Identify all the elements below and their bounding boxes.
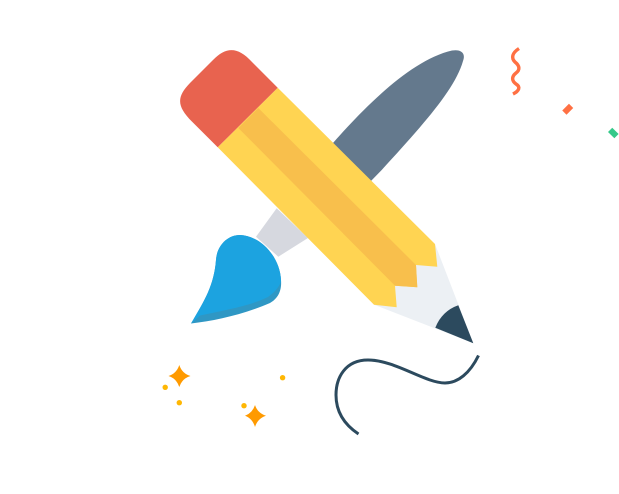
brush ferrule <box>256 208 308 257</box>
brush bristles <box>191 235 281 324</box>
large sparkle <box>168 365 190 387</box>
pencil body <box>218 88 437 307</box>
pencil eraser <box>180 50 278 147</box>
pencil <box>180 50 473 343</box>
pencil lead <box>435 305 473 343</box>
pencil centre stripe <box>238 108 417 287</box>
pencil line drawing <box>336 356 478 434</box>
orange confetti piece <box>562 104 573 115</box>
paintbrush <box>191 50 464 323</box>
orange confetti squiggle <box>513 48 519 94</box>
orange sparkles <box>168 365 266 427</box>
pencil wood tip <box>374 244 473 343</box>
brush handle <box>333 50 464 182</box>
small sparkle <box>245 405 266 427</box>
yellow dots <box>162 375 285 408</box>
green confetti piece <box>608 128 619 138</box>
